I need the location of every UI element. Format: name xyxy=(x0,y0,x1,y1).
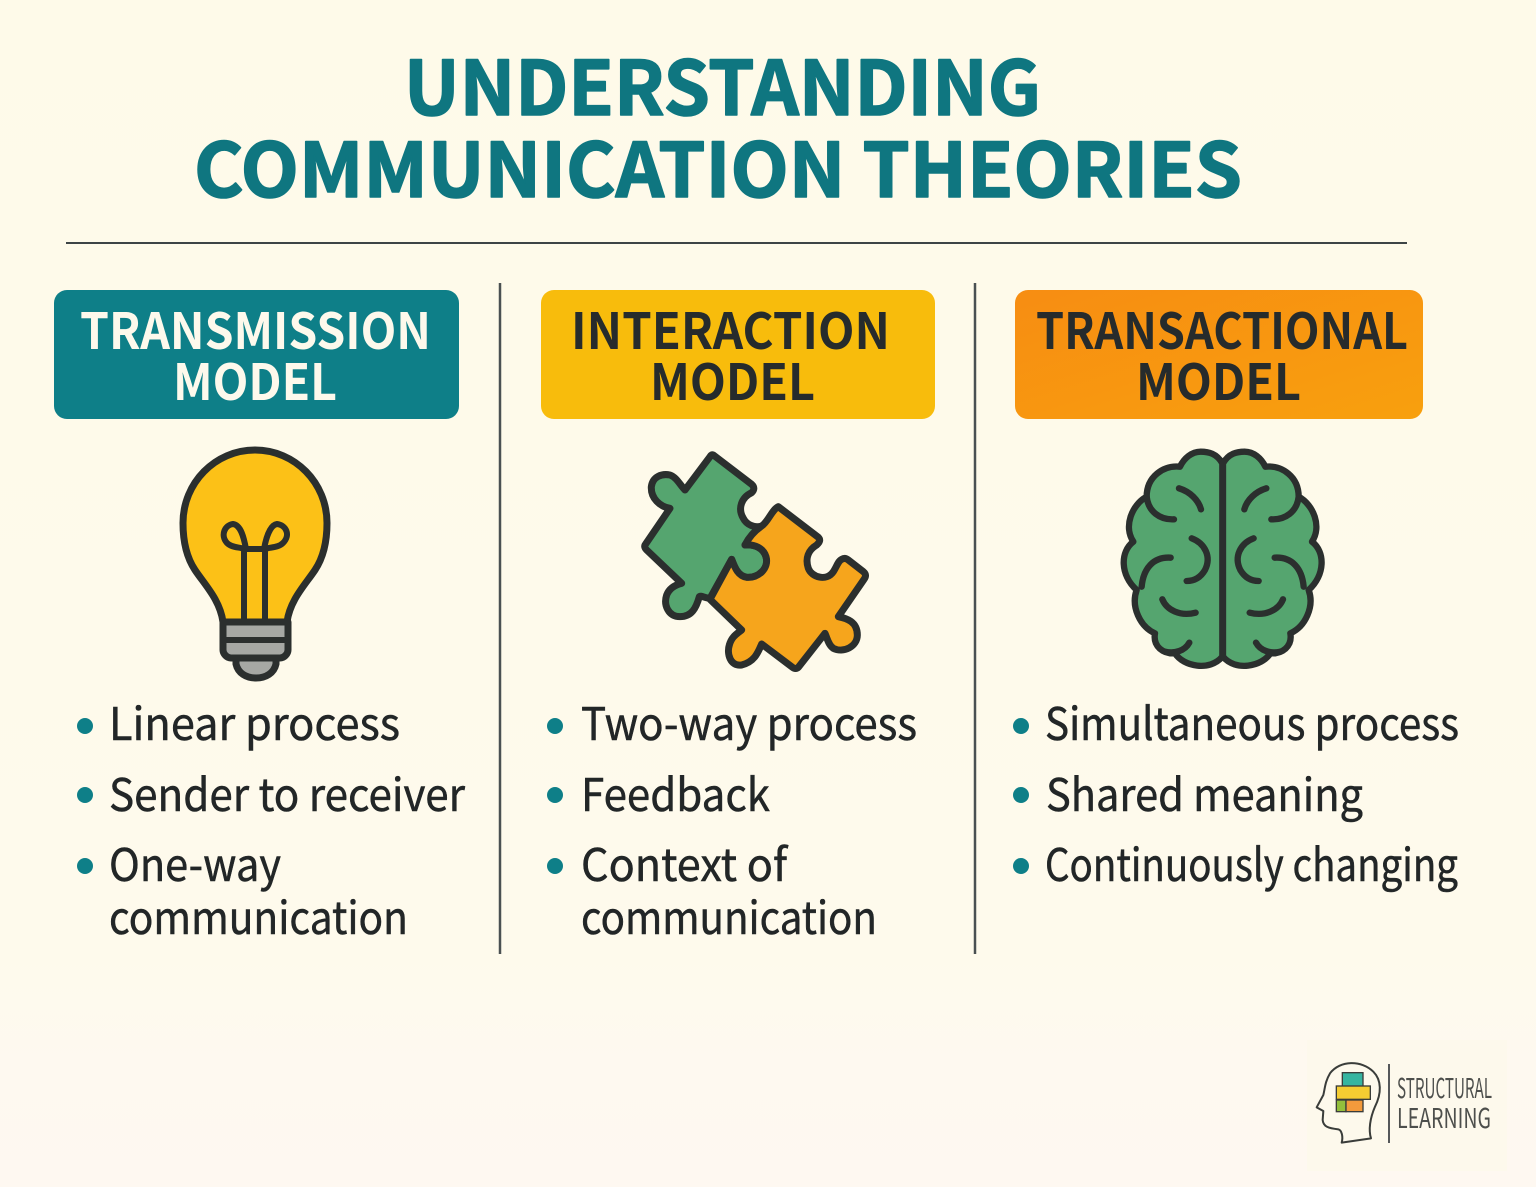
icon: brain xyxy=(1124,452,1322,666)
list: transmission features: Linear process xyxy=(109,688,400,753)
icon: light bulb xyxy=(183,450,327,678)
heading: transmission model: TRANSMISSION xyxy=(80,292,431,364)
list: transmission features: communication xyxy=(109,882,408,947)
panel: transmission model xyxy=(54,290,466,947)
list: interaction features: Context of xyxy=(581,829,789,894)
list: transmission features: Sender to receiver xyxy=(109,759,466,824)
heading: interaction model: MODEL xyxy=(650,343,815,415)
list: interaction features xyxy=(547,688,917,947)
list: transactional features: Simultaneous process xyxy=(1045,688,1459,753)
list: transactional features: Shared meaning xyxy=(1046,759,1363,824)
list: interaction features: Two-way process xyxy=(581,688,917,753)
list: transmission features xyxy=(77,688,466,947)
list: transactional features: Continuously changing xyxy=(1045,829,1458,894)
icon: puzzle pieces xyxy=(645,455,866,669)
list: interaction features: communication xyxy=(581,882,877,947)
title: COMMUNICATION THEORIES xyxy=(194,110,1242,219)
heading: interaction model xyxy=(541,290,935,419)
logo: structural learning: LEARNING xyxy=(1397,1097,1491,1136)
logo: structural learning xyxy=(1307,1040,1507,1171)
title xyxy=(194,28,1242,219)
list: transactional features xyxy=(1013,688,1459,894)
panel: transactional model xyxy=(1013,290,1459,894)
title: UNDERSTANDING xyxy=(404,28,1041,137)
heading: transmission model xyxy=(54,290,459,419)
heading: transactional model: MODEL xyxy=(1136,343,1301,415)
list: interaction features: Feedback xyxy=(581,759,770,824)
list: transmission features: One-way xyxy=(109,829,281,894)
icon: head with blocks xyxy=(1317,1063,1380,1143)
heading: transactional model: TRANSACTIONAL xyxy=(1036,292,1408,364)
heading: transmission model: MODEL xyxy=(173,343,337,415)
heading: transactional model xyxy=(1015,290,1423,419)
heading: interaction model: INTERACTION xyxy=(571,292,890,364)
panel: interaction model xyxy=(541,290,935,947)
